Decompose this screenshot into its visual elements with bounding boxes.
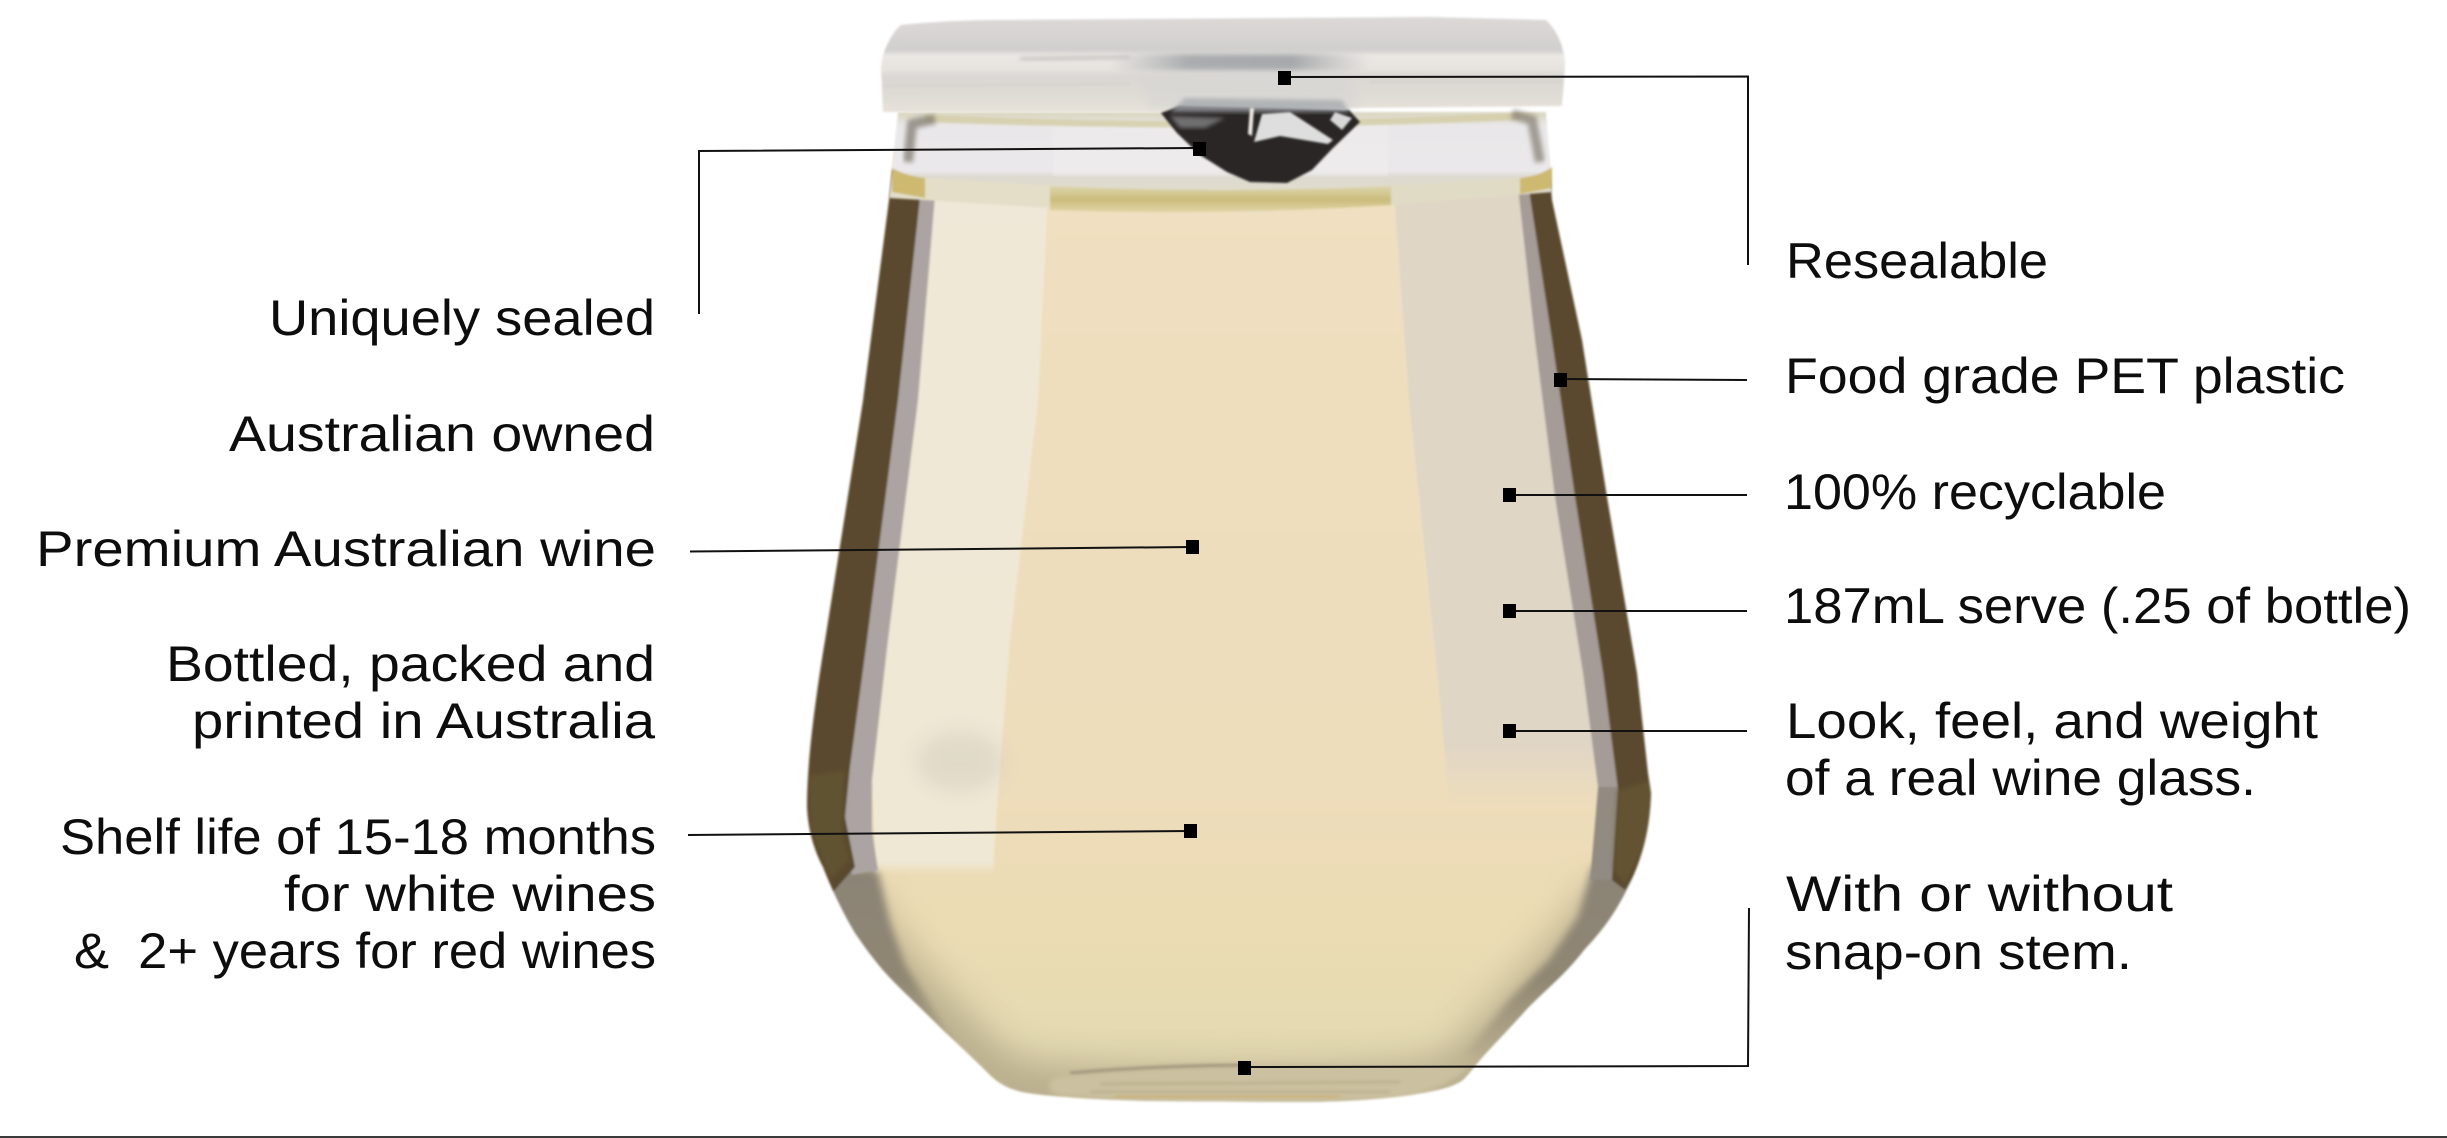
label: resealable: Resealable: [1786, 233, 2048, 289]
label: look, feel, and weight: [1785, 693, 2318, 806]
right tinted panel: [1395, 195, 1594, 770]
label: shelf life: [60, 809, 656, 979]
label: bottled, packed and printed: [166, 636, 655, 749]
left light panel: [872, 150, 1050, 875]
leader: resealable: [1278, 71, 1748, 265]
label: bottled, packed and printed: Bottled, packed and: [166, 636, 655, 692]
glass body with wine: [790, 150, 1680, 1115]
label: shelf life: for white wines: [284, 866, 656, 922]
label: uniquely sealed: Uniquely sealed: [269, 290, 655, 346]
glass foot: [1050, 1068, 1464, 1102]
dark seal tab: [1161, 98, 1360, 183]
leader: food grade PET plastic: [1554, 373, 1747, 387]
label: look, feel, and weight: of a real wine glass.: [1785, 750, 2256, 806]
leader: look and feel: [1503, 724, 1747, 738]
leader: 187mL serve: [1503, 604, 1747, 618]
left grey stripe: [845, 160, 938, 875]
leader: premium wine: [690, 540, 1199, 554]
leader: 100% recyclable: [1503, 488, 1747, 502]
label: with or without stem: With or without: [1786, 866, 2173, 922]
right dark wall: [1526, 170, 1656, 890]
label: bottled, packed and printed: printed in Australia: [192, 693, 655, 749]
label: look, feel, and weight: Look, feel, and weight: [1786, 693, 2318, 749]
label: with or without stem: [1785, 866, 2173, 980]
snap-on lid: [881, 17, 1565, 112]
label: food grade PET plastic: Food grade PET plastic: [1785, 348, 2345, 404]
left dark wall: [800, 170, 923, 892]
label: premium australian wine: Premium Australian wine: [36, 521, 656, 577]
right grey stripe: [1515, 160, 1618, 880]
label: shelf life: & 2+ years for red wines: [74, 923, 656, 979]
wine glass illustration: [790, 17, 1680, 1115]
leader: uniquely sealed: [699, 142, 1206, 314]
leader: shelf life: [688, 824, 1197, 838]
label: 100% recyclable: 100% recyclable: [1784, 464, 2166, 520]
label: with or without stem: snap-on stem.: [1785, 924, 2132, 980]
leader: snap-on stem: [1238, 908, 1749, 1075]
label: shelf life: Shelf life of 15-18 months: [60, 809, 656, 865]
label: australian owned: Australian owned: [229, 406, 655, 462]
glass rim band: [889, 112, 1552, 212]
label: 187mL serve: 187mL serve (.25 of bottle): [1784, 578, 2411, 634]
